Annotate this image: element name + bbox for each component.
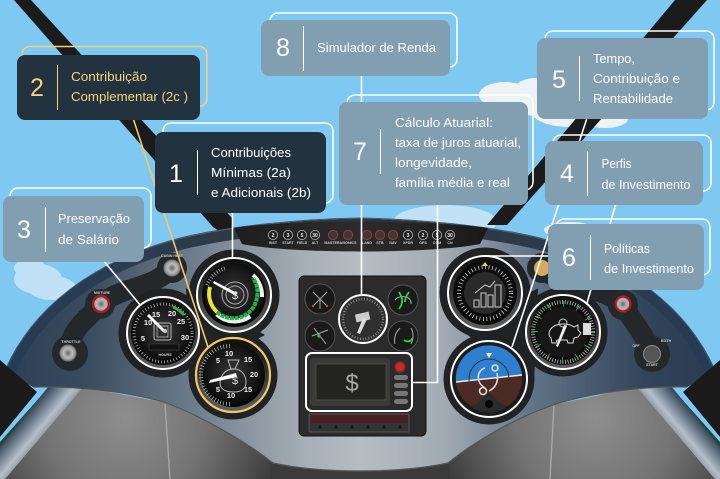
callout 1: Contribuições [211, 145, 291, 160]
top switch strip: 30 [312, 233, 318, 239]
gauge: money bag (Contribuição Complementar): 15 [244, 385, 252, 394]
callout 3: de Salário [58, 232, 119, 247]
cash display (Cálculo Atuarial) [306, 353, 412, 411]
gauge: money bag (Contribuição Complementar): 20 [250, 370, 258, 379]
callout 2: 2 [30, 74, 44, 102]
callout 7: família média e real [395, 175, 510, 190]
callout 4: Perfis [602, 156, 632, 171]
gauge: money bag (Contribuição Complementar): 5 [216, 385, 220, 394]
bottom radio strip [309, 414, 409, 432]
top switch strip: CN [447, 241, 453, 245]
top switch strip: 2 [422, 233, 425, 239]
callout 3: Preservação [58, 211, 130, 226]
gauge: safe (Preservação de Salário): 15 [152, 310, 160, 319]
top switch strip: AVIONICS [339, 241, 357, 245]
callout 6: de Investimento [604, 261, 694, 276]
left knob pods [52, 253, 187, 371]
gauge: attitude indicator (Políticas / Tempo) [451, 341, 527, 417]
gauge: money bag (Contribuição Complementar): $ [232, 375, 238, 387]
callout 6: 6 [562, 244, 576, 272]
right gauge cluster housing [440, 248, 607, 424]
gauge: safe (Preservação de Salário): 20 [168, 309, 176, 318]
left gauge cluster housing [119, 250, 279, 419]
top switch strip: 3 [287, 233, 290, 239]
top switch strip: MASTER [324, 241, 340, 245]
cockpit floor and coaming [0, 387, 720, 479]
callout 8: Simulador de Renda [317, 40, 437, 55]
callout 4: de Investimento [602, 177, 690, 192]
top switch strip: NAV [389, 241, 397, 245]
callout 5: Contribuição e [593, 71, 680, 86]
callout 5: 5 [552, 66, 566, 94]
callout 7: taxa de juros atuarial, [395, 135, 521, 150]
centre instrument panel [299, 276, 426, 436]
top switch strip: START [282, 241, 295, 245]
gauge: money bag (Contribuição Complementar): 10 [225, 349, 233, 358]
gauge: piggy bank clock (Tempo, Contribuição) [526, 295, 600, 369]
callout 1: Mínimas (2a) [211, 165, 291, 180]
top switch strip: GPS [419, 241, 427, 245]
top switch strip: 5 [436, 233, 439, 239]
gauge: safe (Preservação de Salário): HOURS [159, 353, 172, 357]
cash display (Cálculo Atuarial): $ [345, 370, 359, 397]
callout 8: 8 [276, 34, 290, 62]
right knob pods: OFF [632, 344, 640, 348]
gauge: money bag (Contribuição Complementar): 5 [216, 356, 220, 365]
corner shadows [0, 360, 720, 437]
top switch strip: LAND [362, 241, 372, 245]
gauge: speed dial (Contribuições) [197, 258, 271, 332]
callout 7: Cálculo Atuarial: [395, 115, 493, 130]
top switch strip: 3 [407, 233, 410, 239]
callout 3 [3, 188, 151, 262]
right knob pods: BOTH [661, 339, 671, 343]
gauge: money bag (Contribuição Complementar): 10 [227, 391, 235, 400]
gauge: speed dial (Contribuições): $ [232, 290, 238, 302]
gauge: bar chart compass (Perfis de Investimento) [448, 256, 522, 330]
centre gauge (Simulador de Renda) [339, 295, 387, 343]
gauge: safe (Preservação de Salário): 25 [177, 317, 185, 326]
gauge: safe (Preservação de Salário): 10 [144, 318, 152, 327]
connector lines [103, 70, 617, 382]
top switch strip: 30 [447, 233, 453, 239]
callout 5: Tempo, [593, 51, 635, 66]
callout 4: 4 [560, 160, 574, 188]
callout 5 [537, 31, 714, 119]
callout 1: 1 [169, 160, 183, 188]
right knob pods: START [646, 363, 659, 367]
callout 2 [17, 46, 207, 120]
top switch strip: STB [376, 241, 384, 245]
left knob pods: CABIN HEAT [161, 254, 184, 258]
top switch strip: FIELD [297, 241, 308, 245]
gauge: money bag (Contribuição Complementar) [196, 338, 270, 412]
gauge: money bag (Contribuição Complementar): 15 [244, 355, 252, 364]
top switch strip: 2 [272, 233, 275, 239]
top switch strip: COM [433, 241, 441, 245]
right window strut [487, 0, 707, 225]
callout 6 [548, 219, 710, 290]
gauge: safe (Preservação de Salário) [127, 297, 199, 369]
callout 7: longevidade, [395, 155, 472, 170]
callout 7: 7 [353, 138, 367, 166]
top switch strip: 5 [301, 233, 304, 239]
callout 2: Complementar (2c ) [71, 89, 188, 104]
callout 8 [261, 13, 457, 76]
clouds [14, 78, 628, 300]
callout 2: Contribuição [71, 69, 147, 84]
callout 7 [339, 95, 533, 205]
callout 6: Políticas [604, 241, 650, 256]
top switch strip: INST [269, 241, 278, 245]
connector line 2 [133, 118, 208, 347]
left knob pods: THROTTLE [61, 340, 81, 344]
left window strut [14, 0, 232, 240]
top switch strip [234, 222, 488, 252]
callout 3: 3 [17, 216, 31, 244]
callout 4 [545, 135, 711, 205]
callout 1 [155, 123, 333, 213]
callout 5: Rentabilidade [593, 91, 673, 106]
callout 1: e Adicionais (2b) [211, 185, 311, 200]
top switch strip: ALT [312, 241, 319, 245]
left knob pods: MIXTURE [94, 291, 111, 295]
right knob pods [527, 253, 671, 372]
gauge: safe (Preservação de Salário): 30 [181, 333, 189, 342]
dashboard panel [5, 218, 716, 471]
top switch strip: XPDR [403, 241, 413, 245]
gauge: safe (Preservação de Salário): 5 [141, 334, 145, 343]
